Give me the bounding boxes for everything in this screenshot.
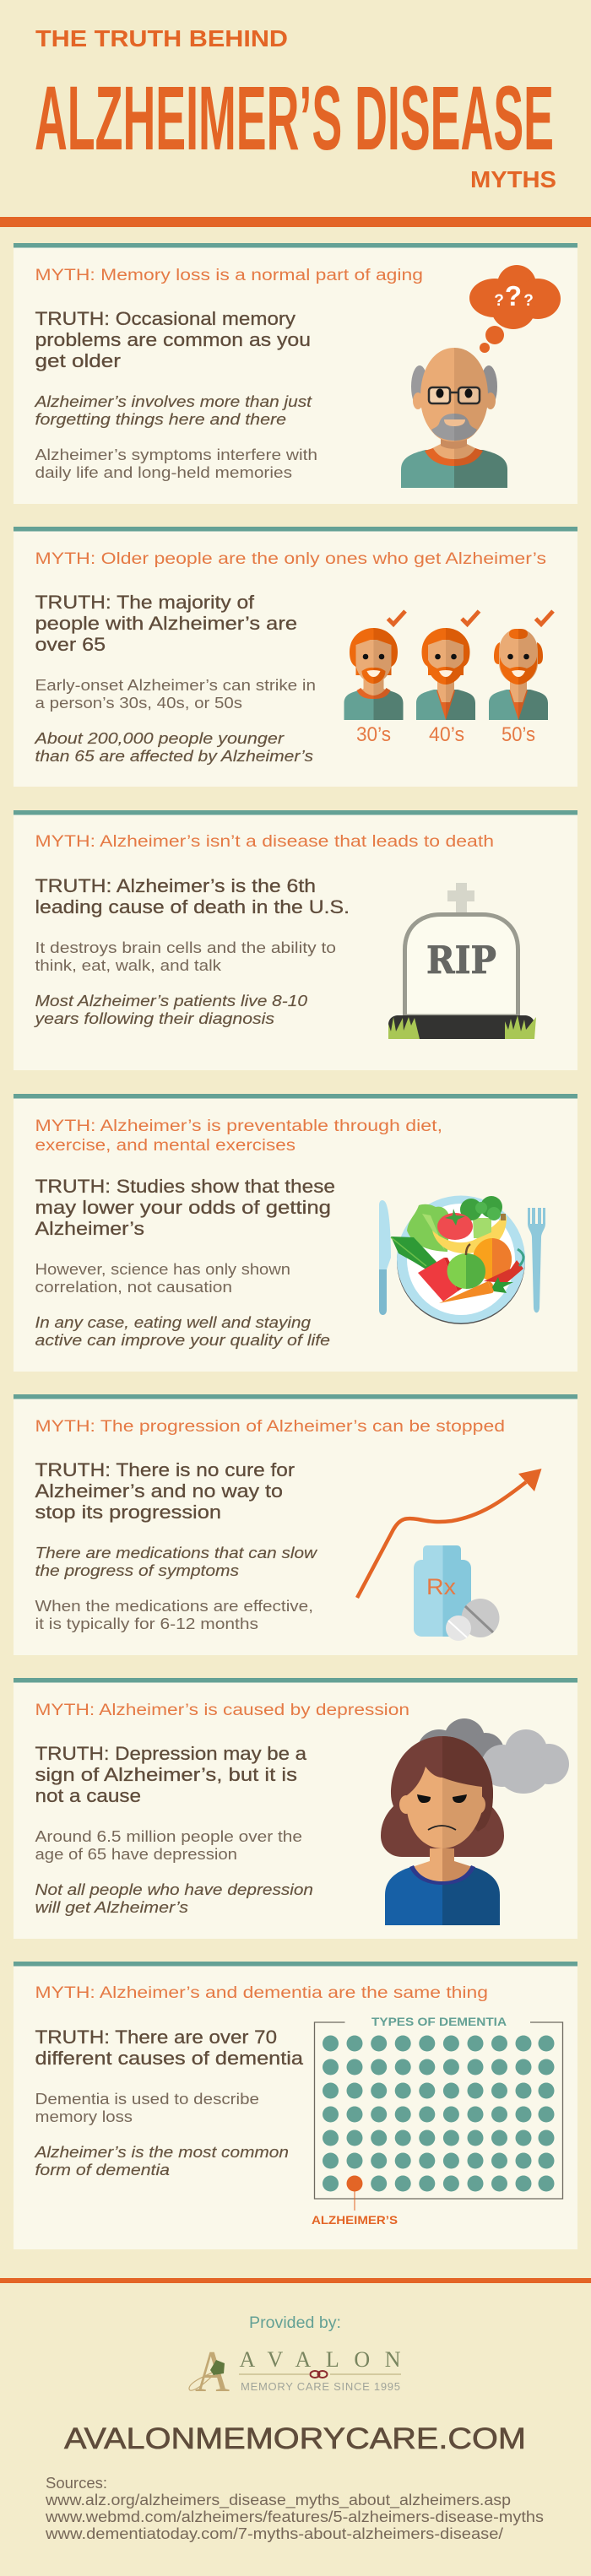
logo: avalon memory care (189, 2340, 401, 2405)
icon: plate of food with knife and fork (379, 1195, 545, 1324)
myth heading: MYTH: Alzheimer’s and dementia are the same thing (35, 1984, 488, 2002)
panel: progression myth (14, 1394, 577, 1655)
chart: types of dementia dot grid (312, 2015, 562, 2227)
panel: memory loss myth (14, 243, 577, 504)
title: myths: MYTHS (470, 166, 556, 192)
truth statement (35, 1459, 295, 1523)
age labels: 40’s (429, 723, 464, 746)
italic note (35, 1545, 317, 1579)
truth statement: people with Alzheimer’s are (35, 613, 297, 634)
truth statement (35, 592, 297, 655)
myth heading: MYTH: Alzheimer’s is caused by depression (35, 1702, 409, 1719)
body text: daily life and long-held memories (35, 464, 292, 481)
icon: prescription bottle and pills: Rx (426, 1574, 457, 1599)
truth statement: may lower your odds of getting (35, 1197, 331, 1218)
body text (35, 677, 316, 712)
truth statement (35, 1176, 335, 1239)
icon: man in 50s (489, 629, 548, 720)
truth statement: get older (35, 350, 121, 371)
italic note (34, 2144, 289, 2178)
icon: tombstone (388, 883, 536, 1039)
truth statement: TRUTH: The majority of (35, 592, 255, 613)
body text (35, 446, 317, 481)
truth statement: TRUTH: Depression may be a (35, 1743, 307, 1764)
truth statement (35, 1743, 307, 1806)
truth statement: sign of Alzheimer’s, but it is (35, 1764, 297, 1785)
italic note: Alzheimer’s involves more than just (34, 393, 312, 410)
italic note: Alzheimer’s is the most common (34, 2144, 289, 2161)
icon: man in 40s (416, 628, 475, 720)
truth statement: not a cause (35, 1785, 141, 1806)
italic note: the progress of symptoms (35, 1562, 239, 1579)
italic note: Most Alzheimer’s patients live 8-10 (35, 993, 307, 1009)
body text (35, 939, 336, 974)
icon: check marks (388, 611, 553, 625)
myth heading: exercise, and mental exercises (35, 1137, 296, 1155)
panel: disease leads to death myth (14, 810, 577, 1070)
dots (323, 2036, 554, 2191)
truth statement: Alzheimer’s (35, 1218, 144, 1239)
logo: avalon memory care: A (195, 2340, 230, 2405)
italic note (33, 993, 307, 1027)
panel: older people myth (14, 527, 577, 787)
icon: thought cloud with question marks: ? (505, 280, 522, 311)
title: the truth behind: THE TRUTH BEHIND (35, 25, 288, 51)
icon: thought cloud with question marks (469, 265, 561, 353)
sources: www.alz.org/alzheimers_disease_myths_about_alzheimers.asp (45, 2492, 511, 2509)
truth statement (35, 308, 311, 371)
body text: it is typically for 6-12 months (35, 1615, 258, 1632)
arrow: rising progression line (357, 1469, 542, 1598)
body text (35, 1261, 290, 1296)
sources: www.dementiatoday.com/7-myths-about-alzheimers-disease/ (45, 2525, 503, 2542)
body text: memory loss (35, 2108, 133, 2125)
italic note: form of dementia (35, 2162, 170, 2178)
panel: depression myth (14, 1678, 577, 1939)
body text (35, 1598, 313, 1632)
Alzheimer's label: ALZHEIMER’S (312, 2213, 398, 2227)
panel: dementia myth (14, 1962, 577, 2249)
footer bar (0, 2278, 591, 2283)
age labels: 30’s (356, 723, 391, 746)
body text: a person’s 30s, 40s, or 50s (35, 695, 242, 712)
header bar (0, 217, 591, 227)
italic note: In any case, eating well and staying (35, 1314, 311, 1331)
icon: tombstone: RIP (426, 938, 496, 982)
body text: correlation, not causation (35, 1279, 232, 1296)
body text: Dementia is used to describe (35, 2091, 259, 2108)
italic note: than 65 are affected by Alzheimer’s (35, 748, 313, 765)
website: AVALONMEMORYCARE.COM (64, 2422, 526, 2455)
provided by label: Provided by: (249, 2314, 341, 2332)
truth statement: TRUTH: Occasional memory (35, 308, 296, 329)
panel: preventable myth (14, 1094, 577, 1372)
icon: grey clouds (417, 1718, 569, 1794)
italic note: forgetting things here and there (35, 411, 286, 428)
italic note: About 200,000 people younger (34, 730, 285, 747)
age labels (356, 723, 535, 746)
icon: older man with glasses (401, 348, 507, 488)
italic note (35, 1314, 330, 1349)
italic note (34, 730, 313, 765)
myth heading: MYTH: Alzheimer’s is preventable through diet, (35, 1118, 442, 1135)
truth statement: problems are common as you (35, 329, 311, 350)
myth heading: MYTH: The progression of Alzheimer’s can be stopped (35, 1418, 505, 1436)
truth statement: different causes of dementia (35, 2048, 304, 2069)
body text: It destroys brain cells and the ability to (35, 939, 336, 956)
logo: avalon memory care: MEMORY CARE SINCE 1995 (241, 2380, 400, 2393)
body text: age of 65 have depression (35, 1846, 237, 1863)
chart title: TYPES OF DEMENTIA (371, 2015, 507, 2028)
truth statement: TRUTH: Alzheimer’s is the 6th (35, 875, 316, 896)
body text: When the medications are effective, (35, 1598, 313, 1615)
italic note: will get Alzheimer’s (35, 1899, 188, 1916)
icon: man in 30s (344, 628, 404, 720)
truth statement: TRUTH: There are over 70 (35, 2027, 277, 2048)
truth statement: Alzheimer’s and no way to (35, 1480, 283, 1502)
myth heading (35, 1118, 442, 1155)
icon: sad woman (381, 1736, 504, 1925)
title block (35, 25, 556, 192)
sources: www.webmd.com/alzheimers/features/5-alzheimers-disease-myths (45, 2508, 544, 2525)
truth statement (35, 875, 350, 917)
myth heading: MYTH: Older people are the only ones who get Alzheimer’s (35, 550, 546, 568)
italic note (35, 1881, 313, 1916)
logo: avalon memory care: AVALON (240, 2347, 401, 2372)
body text (35, 1828, 302, 1863)
body text: Early-onset Alzheimer’s can strike in (35, 677, 316, 694)
icon: thought cloud with question marks: ? (523, 292, 534, 310)
truth statement: leading cause of death in the U.S. (35, 896, 350, 917)
myth heading: MYTH: Alzheimer’s isn’t a disease that leads to death (35, 833, 494, 851)
truth statement: over 65 (35, 634, 106, 655)
icon: thought cloud with question marks: ? (494, 292, 504, 310)
truth statement: TRUTH: There is no cure for (35, 1459, 295, 1480)
truth statement: stop its progression (35, 1502, 221, 1523)
age labels: 50’s (502, 723, 535, 746)
truth statement (35, 2027, 304, 2069)
highlighted Alzheimer's dot with leader (346, 2176, 363, 2211)
italic note: years following their diagnosis (33, 1010, 274, 1027)
body text (35, 2091, 259, 2125)
body text: Around 6.5 million people over the (35, 1828, 302, 1845)
italic note: Not all people who have depression (35, 1881, 313, 1898)
italic note: active can improve your quality of life (35, 1332, 330, 1349)
sources: Sources: (46, 2475, 107, 2492)
italic note (34, 393, 312, 428)
body text: However, science has only shown (35, 1261, 290, 1278)
icon: prescription bottle and pills (414, 1545, 500, 1641)
truth statement: TRUTH: Studies show that these (35, 1176, 335, 1197)
myth heading: MYTH: Memory loss is a normal part of aging (35, 267, 423, 284)
sources (45, 2475, 544, 2542)
italic note: There are medications that can slow (35, 1545, 317, 1561)
body text: Alzheimer’s symptoms interfere with (35, 446, 317, 463)
body text: think, eat, walk, and talk (35, 957, 222, 974)
